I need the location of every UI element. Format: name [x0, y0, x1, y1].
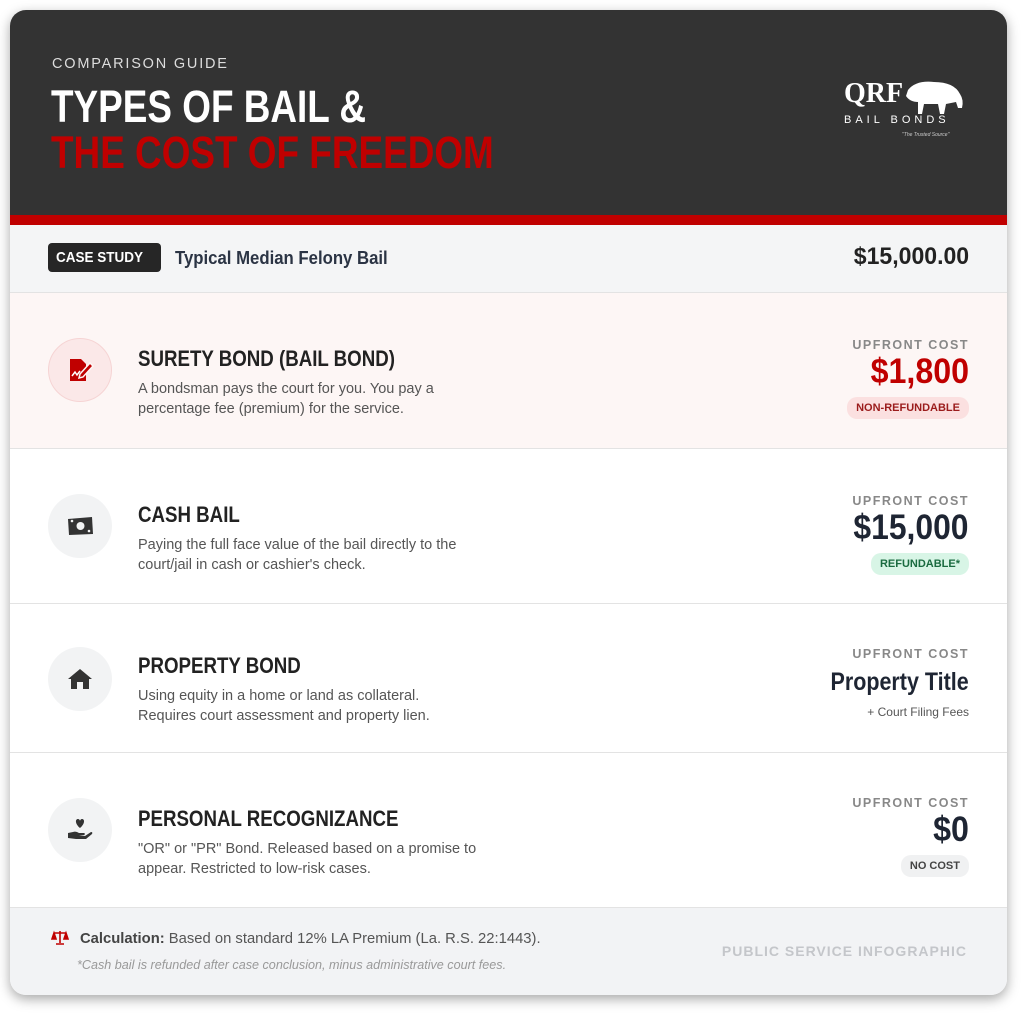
logo: "The Trusted Source": [902, 132, 949, 138]
title: THE COST OF FREEDOM: [51, 127, 494, 178]
description: appear. Restricted to low-risk cases.: [138, 861, 371, 877]
description: court/jail in cash or cashier's check.: [138, 557, 366, 573]
logo: [844, 78, 963, 138]
cost: UPFRONT COST: [852, 494, 969, 508]
case study row: [10, 225, 1007, 293]
calculation note: Calculation: Based on standard 12% LA Premium (La. R.S. 22:1443).: [80, 931, 541, 947]
row: property bond: [10, 604, 1007, 753]
cost: Property Title: [831, 668, 969, 696]
cost: UPFRONT COST: [852, 338, 969, 352]
cost: [852, 494, 969, 575]
cost: $0: [933, 810, 969, 849]
cost: [847, 338, 969, 419]
title: SURETY BOND (BAIL BOND): [138, 346, 395, 371]
cost: $1,800: [871, 352, 969, 391]
icon: scales: [51, 930, 69, 945]
cost: NO COST: [910, 860, 960, 872]
icon: house: [48, 647, 112, 711]
cost: + Court Filing Fees: [867, 705, 969, 719]
cost: UPFRONT COST: [852, 647, 969, 661]
logo: BAIL BONDS: [844, 114, 950, 126]
cost: REFUNDABLE*: [880, 558, 960, 570]
row: personal recognizance: [10, 753, 1007, 908]
description: percentage fee (premium) for the service.: [138, 401, 404, 417]
description: "OR" or "PR" Bond. Released based on a promise to: [138, 841, 476, 857]
header: [10, 10, 1007, 215]
badge: [48, 243, 161, 272]
badge: CASE STUDY: [56, 249, 143, 266]
icon: hand heart: [48, 798, 112, 862]
title: CASH BAIL: [138, 502, 240, 527]
title: PERSONAL RECOGNIZANCE: [138, 806, 398, 831]
description: [138, 537, 456, 573]
title: PROPERTY BOND: [138, 653, 301, 678]
row: cash bail: [10, 449, 1007, 604]
cost: UPFRONT COST: [852, 796, 969, 810]
logo: QRF: [844, 78, 903, 109]
icon: document pen: [48, 338, 112, 402]
cost: NON-REFUNDABLE: [856, 402, 960, 414]
title: TYPES OF BAIL &: [51, 81, 366, 132]
description: [138, 688, 430, 724]
cost: [852, 796, 969, 877]
icon: cash: [48, 494, 112, 558]
cost: [831, 647, 969, 719]
cost: $15,000: [854, 508, 969, 547]
kicker: COMPARISON GUIDE: [52, 56, 229, 72]
case label: Typical Median Felony Bail: [175, 248, 388, 268]
row: surety bond: [10, 293, 1007, 449]
tagline: PUBLIC SERVICE INFOGRAPHIC: [722, 943, 967, 959]
description: [138, 381, 434, 417]
description: Using equity in a home or land as collateral.: [138, 688, 419, 704]
description: A bondsman pays the court for you. You pay a: [138, 381, 434, 397]
description: Paying the full face value of the bail directly to the: [138, 537, 456, 553]
footnote: *Cash bail is refunded after case conclusion, minus administrative court fees.: [77, 958, 506, 972]
case amount: $15,000.00: [854, 243, 969, 270]
description: [138, 841, 476, 877]
description: Requires court assessment and property lien.: [138, 708, 430, 724]
footer: [10, 908, 1007, 995]
title: [51, 81, 494, 178]
